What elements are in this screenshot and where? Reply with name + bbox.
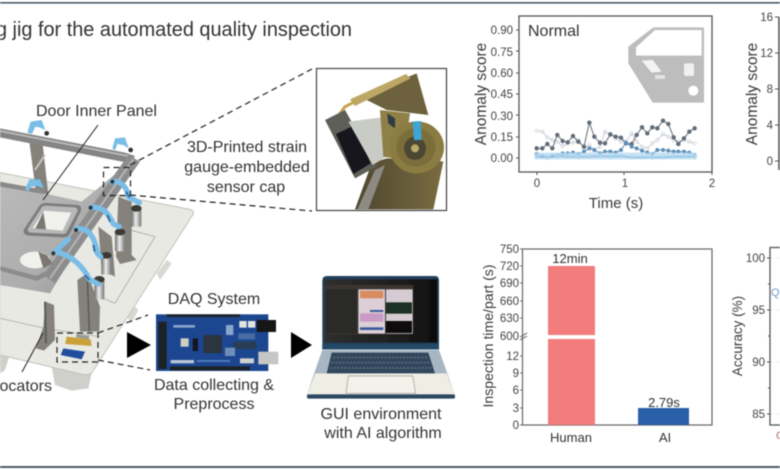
leader: door inner panel: [43, 125, 98, 200]
y ticks: 6: [513, 385, 519, 397]
bottom border: [0, 466, 780, 468]
chart: second anomaly score (clipped): 0: [767, 156, 773, 168]
y axis ticks: [491, 25, 513, 165]
chart: accuracy (clipped): 90: [752, 357, 765, 369]
y axis ticks: 0.45: [491, 89, 513, 101]
round hole: [20, 252, 50, 268]
jig illustration: [0, 120, 193, 391]
y axis ticks: 0.15: [491, 132, 513, 144]
x axis ticks: 1: [622, 178, 628, 190]
laptop: [307, 276, 455, 399]
label: data collecting: Data collecting &: [154, 377, 274, 394]
clipped legend mark: Q: [771, 287, 780, 299]
sensor cap photo: [316, 68, 446, 210]
y ticks: 750: [500, 244, 519, 256]
dashed zoom lines: [98, 69, 312, 370]
base plate: [0, 173, 193, 375]
chart: accuracy (clipped): 85: [752, 409, 765, 421]
y axis label: Anomaly score: [744, 43, 761, 145]
AI bar: [638, 408, 689, 425]
panel title: Normal: [528, 23, 580, 40]
blue clamps: [54, 181, 139, 284]
chart: inspection time: [480, 244, 712, 445]
DAQ board: [156, 314, 278, 371]
chart: accuracy (clipped): 95: [752, 305, 765, 317]
value labels: 2.79s: [648, 395, 680, 410]
series lines: [535, 121, 697, 159]
x axis label: Time (s): [589, 195, 643, 212]
top border: [0, 2, 780, 4]
flow arrow 2: [291, 332, 312, 358]
title: g jig for the automated quality inspection: [0, 19, 352, 41]
label: GUI environment: with AI algorithm: [323, 425, 442, 442]
y axis label: Anomaly score: [473, 43, 490, 145]
y axis ticks: 0.90: [491, 25, 513, 37]
y ticks: 600: [500, 331, 519, 343]
y ticks: 9: [513, 368, 519, 380]
y ticks: 690: [500, 278, 519, 290]
label: door inner panel: Door Inner Panel: [36, 103, 157, 120]
frame rails: [0, 128, 135, 163]
x axis ticks: 2: [709, 178, 715, 190]
door icon: [628, 27, 704, 103]
x axis ticks: 0: [534, 178, 540, 190]
label: GUI environment: [321, 406, 442, 442]
human bar: [548, 266, 595, 425]
y axis ticks: 0.30: [491, 111, 513, 123]
chart: normal anomaly score: [473, 16, 715, 212]
dashed detail box: module: [57, 333, 98, 362]
chart: second anomaly score (clipped): 16: [760, 12, 773, 24]
y axis label: Accuracy (%): [730, 296, 745, 376]
chart: second anomaly score (clipped): 8: [767, 84, 773, 96]
label: sensor cap: [184, 139, 310, 196]
y ticks: [500, 244, 519, 432]
locator posts: [29, 142, 137, 351]
x axis ticks: [534, 178, 715, 190]
value labels: [552, 251, 680, 410]
y ticks: 0: [513, 420, 519, 432]
y axis label: Inspection time/part (s): [480, 264, 496, 408]
feet: [0, 260, 172, 391]
chart: accuracy (clipped): 100: [746, 253, 765, 265]
y axis ticks: 0.00: [491, 153, 513, 165]
label: sensor cap: gauge-embedded: [184, 159, 310, 176]
y ticks: 630: [500, 313, 519, 325]
leader: locators: [22, 333, 43, 372]
chart: second anomaly score (clipped): [744, 12, 779, 170]
laptop body: [307, 276, 455, 399]
label: DAQ system: DAQ System: [168, 291, 260, 308]
chart: accuracy (clipped): [730, 248, 780, 442]
x labels: AI: [659, 430, 671, 445]
chart: second anomaly score (clipped): 4: [767, 120, 774, 132]
label: data collecting: Preprocess: [174, 396, 254, 413]
y axis ticks: 0.75: [491, 47, 513, 59]
axis break: [520, 333, 527, 340]
dashed detail box: sensor: [104, 168, 130, 196]
x labels: Human: [550, 430, 592, 445]
label: data collecting: [154, 377, 274, 413]
label: sensor cap: sensor cap: [207, 179, 285, 196]
label: GUI environment: GUI environment: [321, 406, 442, 423]
y ticks: 660: [500, 296, 519, 308]
label: sensor cap: 3D-Printed strain: [187, 139, 307, 156]
x labels: [550, 430, 671, 445]
y ticks: 720: [500, 261, 519, 273]
flow arrow 1: [127, 332, 151, 358]
cylinders: [94, 208, 141, 299]
value labels: 12min: [552, 251, 588, 266]
y axis ticks: 0.60: [491, 68, 513, 80]
y ticks: 3: [513, 403, 519, 415]
chart: second anomaly score (clipped): 12: [760, 48, 773, 60]
y ticks: 12: [506, 351, 519, 363]
window opening: [24, 203, 81, 237]
door inner panel: [0, 163, 128, 293]
DAQ wiring module: [61, 334, 92, 359]
